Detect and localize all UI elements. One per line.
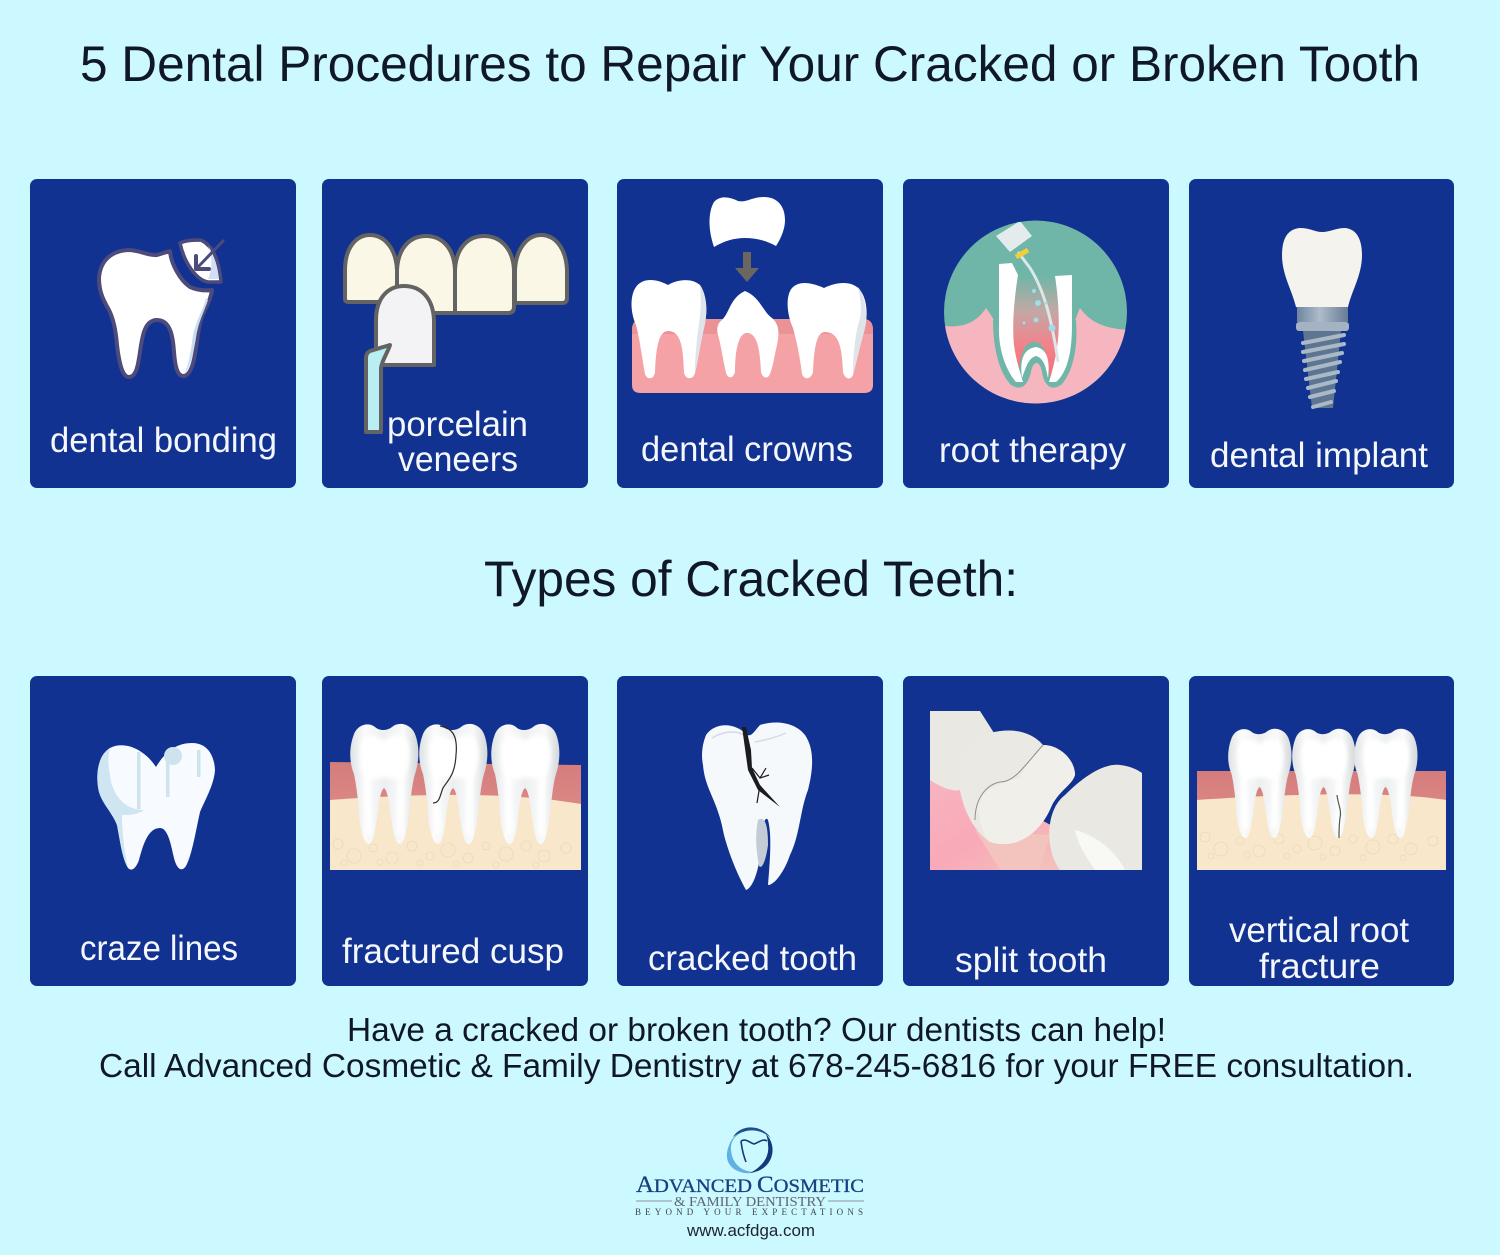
icon: logo ring and tooth	[727, 1127, 773, 1173]
label	[1229, 911, 1409, 986]
icon: craze tooth	[97, 743, 215, 870]
panel: porcelain veneers	[322, 179, 588, 488]
icon: implant	[1282, 228, 1362, 408]
logo subtitle: & FAMILY DENTISTRY	[674, 1195, 826, 1210]
label: cracked tooth	[648, 939, 857, 978]
label: fractured cusp	[342, 932, 564, 971]
logo	[635, 1127, 864, 1240]
panel: root therapy	[903, 179, 1169, 488]
logo name: ADVANCED COSMETIC	[636, 1172, 864, 1197]
label: fracture	[1259, 947, 1380, 986]
label: porcelain	[387, 405, 528, 444]
panel: dental crowns	[617, 179, 883, 488]
label: split tooth	[955, 941, 1107, 980]
label: root therapy	[939, 431, 1126, 470]
call to action: Call Advanced Cosmetic & Family Dentistry at 678-245-6816 for your FREE consultation.	[99, 1047, 1414, 1084]
logo tagline: BEYOND YOUR EXPECTATIONS	[635, 1207, 863, 1217]
label: dental implant	[1210, 436, 1428, 475]
label: dental bonding	[50, 421, 277, 460]
panel: dental bonding	[30, 179, 296, 488]
icon: root canal	[944, 220, 1127, 404]
panel: cracked tooth	[617, 676, 883, 986]
label: veneers	[398, 440, 518, 479]
label: dental crowns	[641, 430, 853, 469]
panel: craze lines	[30, 676, 296, 986]
panel: fractured cusp	[322, 676, 588, 986]
image: vertical root fracture teeth	[1197, 729, 1446, 870]
label	[387, 405, 528, 479]
panel: dental implant	[1189, 179, 1454, 488]
call to action: Have a cracked or broken tooth? Our dentists can help!	[347, 1011, 1166, 1048]
image: cracked tooth	[702, 722, 812, 890]
icon: bonded tooth	[99, 240, 223, 377]
image: fractured cusp teeth	[330, 724, 581, 870]
panel: vertical root fracture	[1189, 676, 1454, 986]
call to action	[99, 1011, 1414, 1084]
panel: split tooth	[903, 676, 1169, 986]
image: split tooth	[930, 711, 1142, 870]
label: vertical root	[1229, 911, 1409, 950]
section heading: types of cracked teeth: Types of Cracked Teeth:	[484, 551, 1018, 607]
icon: crown and teeth	[632, 197, 873, 393]
website: www.acfdga.com	[686, 1221, 815, 1240]
icon: veneers	[345, 235, 567, 432]
label: craze lines	[80, 929, 238, 968]
title: 5 Dental Procedures to Repair Your Cracked or Broken Tooth	[80, 36, 1420, 92]
